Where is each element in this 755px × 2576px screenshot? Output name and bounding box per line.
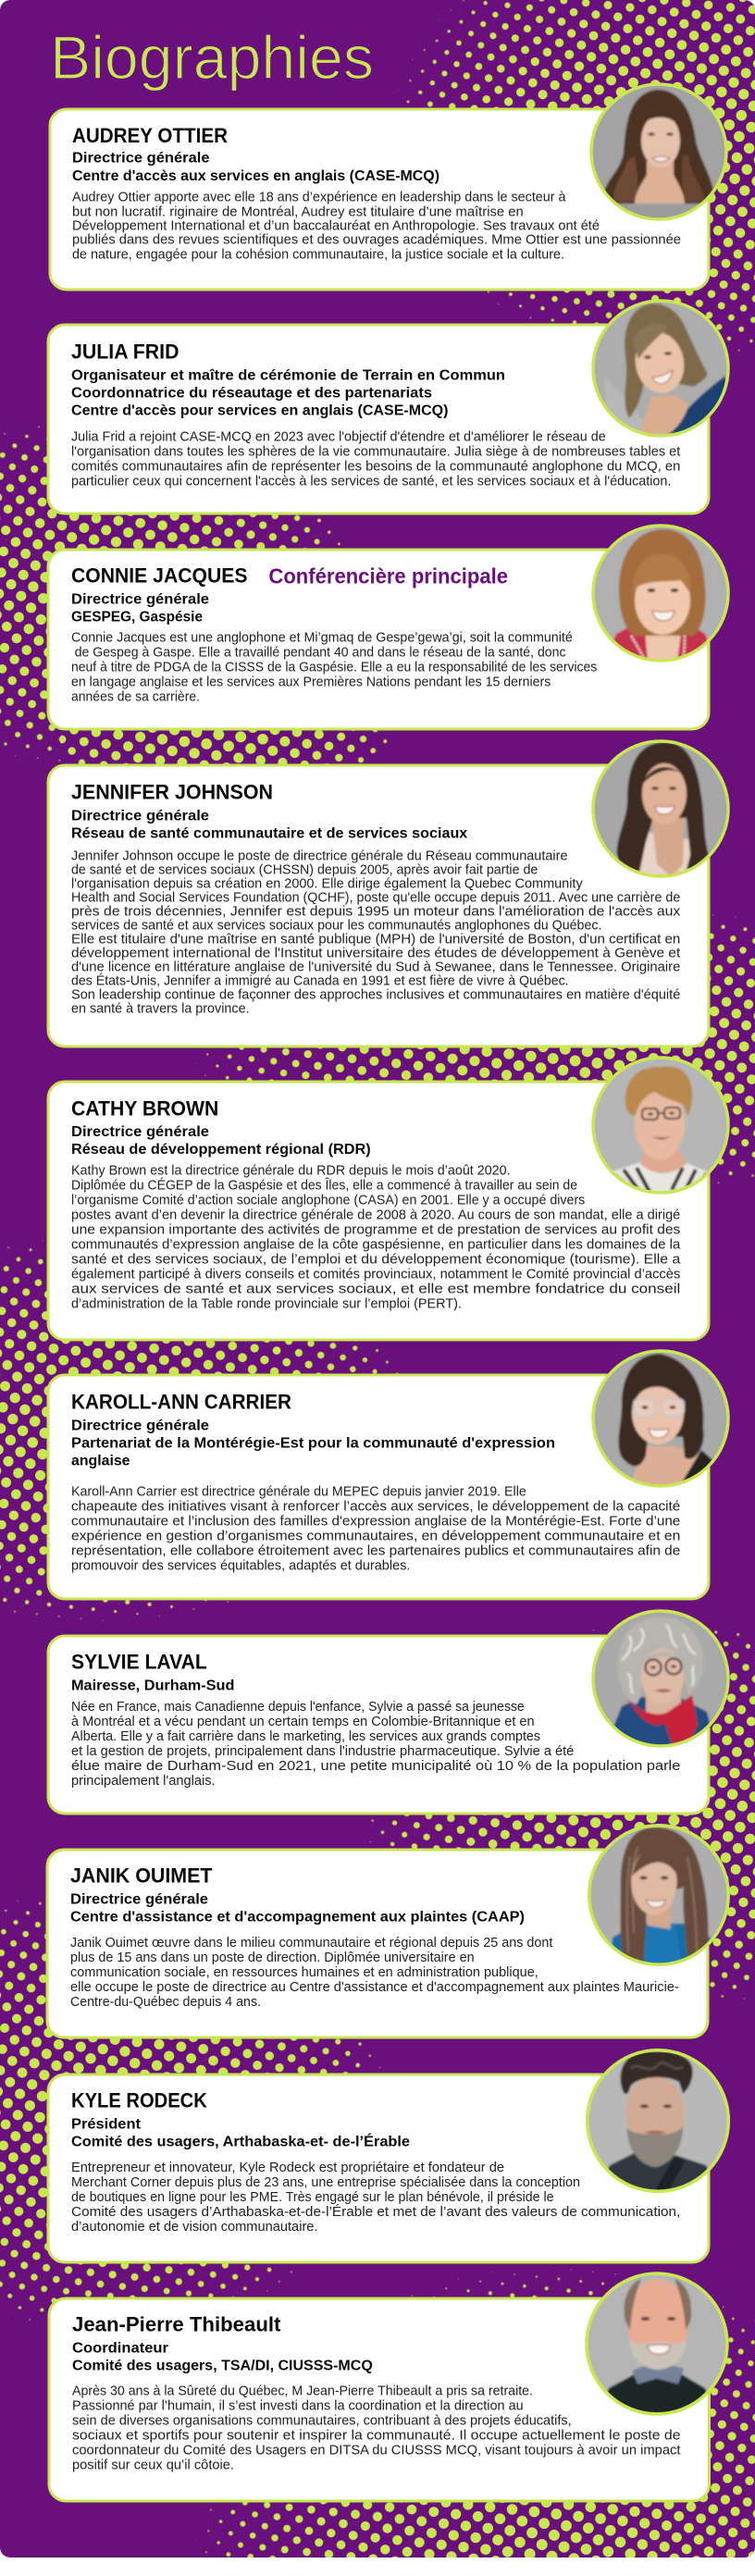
role <box>71 808 467 841</box>
biography text: aux services de santé et aux services sociaux, et elle est membre fondatrice du conseil <box>71 1282 680 1297</box>
portrait: Connie Jacques <box>591 524 730 663</box>
biography text: l'organisation dans toutes les sphères de la vie communautaire. Julia siège à de nombreuses tables et <box>71 445 680 460</box>
biography text: Après 30 ans à la Sûreté du Québec, M Jean-Pierre Thibeault a pris sa retraite. <box>72 2384 533 2399</box>
biography text: postes avant d’en devenir la directrice générale de 2008 à 2020. Au cours de son mandat, elle a dirigé <box>71 1208 680 1223</box>
biography text <box>71 1485 680 1574</box>
biography text: d’autonomie et de vision communautaire. <box>71 2220 318 2235</box>
panel: Janik Ouimet <box>47 1819 735 2037</box>
role <box>71 1418 555 1468</box>
biography text: développement international de l'Institut universitaire des études de développement à Genève et <box>71 947 680 961</box>
panel: Cathy Brown <box>48 1051 735 1340</box>
biography text: chapeaute des initiatives visant à renforcer l’accès aux services, le développement de la capacité <box>71 1500 680 1515</box>
biography text: Diplômée du CÉGEP de la Gaspésie et des Îles, elle a commencé à travailler au sein de <box>71 1178 577 1194</box>
biography text: particulier ceux qui concernent l'accès à les services de santé, et les services sociaux et à l'éducation. <box>71 475 671 489</box>
biography text: Née en France, mais Canadienne depuis l'enfance, Sylvie a passé sa jeunesse <box>71 1700 525 1715</box>
biography text: de Gespeg à Gaspe. Elle a travaillé pendant 40 and dans le réseau de la santé, donc <box>75 646 565 661</box>
portrait: Sylvie Laval <box>591 1609 730 1748</box>
role: GESPEG, Gaspésie <box>71 609 203 625</box>
biography text: communautaire et l’inclusion des familles d'expression anglaise de la Montérégie-Est. Forte d’une <box>71 1515 680 1530</box>
biography text: Comité des usagers d’Arthabaska-et-de-l’Érable et met de l’avant des valeurs de communication, <box>71 2204 680 2220</box>
biography text: Centre-du-Québec depuis 4 ans. <box>70 1995 261 2010</box>
biography text: neuf à titre de PDGA de la CISSS de la Gaspésie. Elle a eu la responsabilité de les services <box>71 661 597 675</box>
card <box>48 550 709 729</box>
role: Coordinateur <box>72 2340 168 2356</box>
biography text: et la gestion de projets, principalement dans l'industrie pharmaceutique. Sylvie a été <box>71 1744 574 1759</box>
role <box>70 1891 525 1925</box>
biography text: Entrepreneur et innovateur, Kyle Rodeck est propriétaire et fondateur de <box>71 2161 504 2175</box>
biography text: communautés d’expression anglaise de la côte gaspésienne, en particulier dans les domaines de la <box>71 1238 681 1253</box>
role <box>71 591 209 625</box>
biography text <box>71 1700 680 1789</box>
biography text: Elle est titulaire d'une maîtrise en santé publique (MPH) de l'université de Boston, d'un certificat en <box>71 933 680 947</box>
biography text: santé et des services sociaux, de l’emploi et du développement économique (tourisme). Elle a <box>71 1253 681 1268</box>
biography text: sociaux et sportifs pour soutenir et inspirer la communauté. Il occupe actuellement le poste de <box>72 2429 681 2444</box>
role <box>72 2340 373 2373</box>
biography text: Connie Jacques est une anglophone et Mi’gmaq de Gespe’gewa’gi, soit la communité <box>71 631 573 646</box>
biography text: Karoll-Ann Carrier est directrice générale du MEPEC depuis janvier 2019. Elle <box>71 1485 526 1500</box>
biography text: Développement International et d’un baccalauréat en Anthropologie. Ses travaux ont été <box>72 219 600 234</box>
biography text: expérience en gestion d’organismes communautaires, en développement communautaire et en <box>71 1530 680 1544</box>
name: KAROLL-ANN CARRIER <box>71 1391 291 1414</box>
biography text: en langage anglaise et les services aux Premières Nations pendant les 15 derniers <box>71 675 551 690</box>
role: Organisateur et maître de cérémonie de Terrain en Commun <box>71 367 505 383</box>
biography text: l’organisme Comité d’action sociale anglophone (CASA) en 2001. Elle y a occupé divers <box>71 1194 585 1208</box>
name: KYLE RODECK <box>71 2089 207 2112</box>
role: Coordonnatrice du réseautage et des partenariats <box>71 385 432 401</box>
biography text: de nature, engagée pour la cohésion communautaire, la justice sociale et la culture. <box>72 248 564 263</box>
biography text: Janik Ouimet œuvre dans le milieu communautaire et régional depuis 25 ans dont <box>70 1936 552 1951</box>
biography text <box>71 2161 680 2235</box>
role <box>72 151 439 184</box>
role <box>71 2116 410 2149</box>
biography text: de santé et de services sociaux (CHSSN) depuis 2005, après avoir fait partie de <box>71 863 538 878</box>
role: anglaise <box>71 1453 130 1468</box>
role: Directrice générale <box>72 151 210 167</box>
card <box>48 2074 709 2262</box>
role: Comité des usagers, TSA/DI, CIUSSS-MCQ <box>72 2358 373 2373</box>
biography text: comités communautaires afin de représenter les besoins de la communauté anglophone du MCQ, en <box>71 460 680 475</box>
role: Réseau de santé communautaire et de services sociaux <box>71 825 467 841</box>
biography text: des États-Unis, Jennifer a immigré au Canada en 1991 et est fière de vivre à Québec. <box>71 973 569 989</box>
biography text: élue maire de Durham-Sud en 2021, une petite municipalité où 10 % de la population parle <box>71 1759 680 1774</box>
biography text: Kathy Brown est la directrice générale du RDR depuis le mois d’août 2020. <box>71 1164 511 1179</box>
card <box>48 1636 709 1814</box>
biography text: en santé à travers la province. <box>71 1002 250 1017</box>
portrait: Jennifer Johnson <box>591 739 730 878</box>
portrait: Kyle Rodeck <box>585 2049 731 2193</box>
biography text: publiés dans des revues scientifiques et des ouvrages académiques. Mme Ottier est une passionnée <box>72 233 681 248</box>
role: Partenariat de la Montérégie-Est pour la communauté d'expression <box>71 1435 555 1451</box>
biography text <box>71 1164 681 1312</box>
biography text <box>71 631 597 705</box>
panel: Julia Frid <box>48 294 735 514</box>
card <box>48 1082 709 1340</box>
role: Directrice générale <box>71 1124 209 1140</box>
portrait: Janik Ouimet <box>588 1824 730 1966</box>
biography text <box>71 430 680 489</box>
biography text: représentation, elle collabore étroitement avec les partenaires publics et communautaires afin de <box>71 1544 680 1559</box>
name: SYLVIE LAVAL <box>71 1651 207 1674</box>
panel: Sylvie Laval <box>48 1604 735 1814</box>
biography text <box>70 1936 679 2010</box>
portrait: Cathy Brown <box>591 1056 730 1195</box>
biography text: près de trois décennies, Jennifer est depuis 1995 un moteur dans l'amélioration de l'accès aux <box>71 905 681 920</box>
name: JANIK OUIMET <box>70 1864 213 1888</box>
biography text <box>71 849 681 1017</box>
card <box>48 325 709 514</box>
role: Mairesse, Durham-Sud <box>71 1678 234 1693</box>
role <box>71 367 505 418</box>
name: JULIA FRID <box>71 341 179 364</box>
keynote label: Conférencière principale <box>268 564 508 588</box>
card <box>48 765 709 1046</box>
name: CATHY BROWN <box>71 1096 218 1120</box>
biography text: de boutiques en ligne pour les PME. Très engagé sur le plan bénévole, il préside le <box>71 2190 553 2205</box>
role: Directrice générale <box>71 1418 209 1433</box>
card <box>48 1375 709 1599</box>
biography text: une expansion importante des activités de programme et de prestation de services au profit des <box>71 1223 680 1238</box>
biography text: Audrey Ottier apporte avec elle 18 ans d’expérience en leadership dans le secteur à <box>72 191 566 205</box>
biography text: années de sa carrière. <box>71 690 200 705</box>
biography text: Jennifer Johnson occupe le poste de directrice générale du Réseau communautaire <box>71 849 568 864</box>
biography text: Son leadership continue de façonner des approches inclusives et communautaires en matière d'équité <box>71 988 680 1003</box>
role: Directrice générale <box>71 808 209 824</box>
role: Centre d'accès pour services en anglais (CASE-MCQ) <box>71 402 448 418</box>
card <box>47 1850 708 2037</box>
name: CONNIE JACQUES <box>71 564 248 588</box>
name: JENNIFER JOHNSON <box>71 780 273 803</box>
role: Centre d'assistance et d'accompagnement aux plaintes (CAAP) <box>70 1909 525 1925</box>
biography text: promouvoir des services équitables, adaptés et durables. <box>71 1559 410 1574</box>
role: Comité des usagers, Arthabaska-et- de-l’Érable <box>71 2132 410 2149</box>
biography text: d'une licence en littérature anglaise de l'université du Sud à Sewanee, dans le Tennessee. Originaire <box>71 960 680 975</box>
role <box>71 1124 371 1158</box>
biography text: Alberta. Elle y a fait carrière dans le marketing, les services aux grands comptes <box>71 1729 540 1744</box>
biography text: l'organisation depuis sa création en 2000. Elle dirige également la Quebec Community <box>71 877 583 892</box>
card <box>49 2298 709 2501</box>
biography text: Julia Frid a rejoint CASE-MCQ en 2023 avec l'objectif d'étendre et d'améliorer le réseau de <box>71 430 606 445</box>
role: Président <box>71 2116 142 2132</box>
portrait: Audrey Ottier <box>589 82 728 221</box>
name: AUDREY OTTIER <box>72 124 228 147</box>
biography text: Merchant Corner depuis plus de 23 ans, une entreprise spécialisée dans la conception <box>71 2175 580 2190</box>
biography text: sein de diverses organisations communautaires, contribuant à des projets éducatifs, <box>72 2414 572 2429</box>
biography text <box>72 2384 681 2473</box>
biography text: Health and Social Services Foundation (QCHF), poste qu'elle occupe depuis 2011. Avec une carrière de <box>71 891 680 906</box>
card <box>50 109 709 290</box>
biography text: positif sur ceux qu’il côtoie. <box>72 2458 234 2473</box>
biography text: d’administration de la Table ronde provinciale sur l’emploi (PERT). <box>71 1297 462 1312</box>
panel: Jean-Pierre Thibeault <box>49 2267 734 2501</box>
portrait: Karoll-Ann Carrier <box>591 1349 730 1488</box>
biography text: coordonnateur du Comité des Usagers en DITSA du CIUSSS MCQ, visant toujours à avoir un impact <box>72 2444 681 2458</box>
biography text: Passionné par l’humain, il s’est investi dans la coordination et la direction au <box>72 2399 524 2414</box>
role: Directrice générale <box>70 1891 208 1907</box>
panel: Kyle Rodeck <box>48 2043 736 2262</box>
panel: Karoll-Ann Carrier <box>48 1344 735 1599</box>
role: Centre d'accès aux services en anglais (CASE-MCQ) <box>72 168 439 184</box>
biography text: plus de 15 ans dans un poste de direction. Diplômée universitaire en <box>70 1951 475 1965</box>
biography text <box>72 191 681 263</box>
panel: Connie Jacques <box>48 519 735 729</box>
portrait: Julia Frid <box>591 299 730 438</box>
title: Biographies <box>50 23 374 92</box>
biography text: communication sociale, en ressources humaines et en administration publique, <box>70 1965 538 1980</box>
role: Directrice générale <box>71 591 209 607</box>
portrait: Jean-Pierre Thibeault <box>585 2272 729 2416</box>
role: Réseau de développement régional (RDR) <box>71 1142 371 1158</box>
panel: Jennifer Johnson <box>48 735 735 1046</box>
biography text: elle occupe le poste de directrice au Centre d'assistance et d'accompagnement aux plaintes Mauricie- <box>70 1980 679 1995</box>
panel: Audrey Ottier <box>50 78 733 290</box>
biography text: but non lucratif. riginaire de Montréal, Audrey est titulaire d’une maîtrise en <box>72 205 524 220</box>
biography text: services de santé et aux services sociaux pour les communautés anglophones du Québec. <box>71 919 601 934</box>
biography text: également participé à divers conseils et comités provinciaux, notamment le Comité provincial d’accès <box>71 1268 680 1282</box>
name: Jean-Pierre Thibeault <box>72 2312 281 2335</box>
biography text: à Montréal et a vécu pendant un certain temps en Colombie-Britannique et en <box>71 1715 535 1729</box>
biography text: principalement l'anglais. <box>71 1774 216 1789</box>
